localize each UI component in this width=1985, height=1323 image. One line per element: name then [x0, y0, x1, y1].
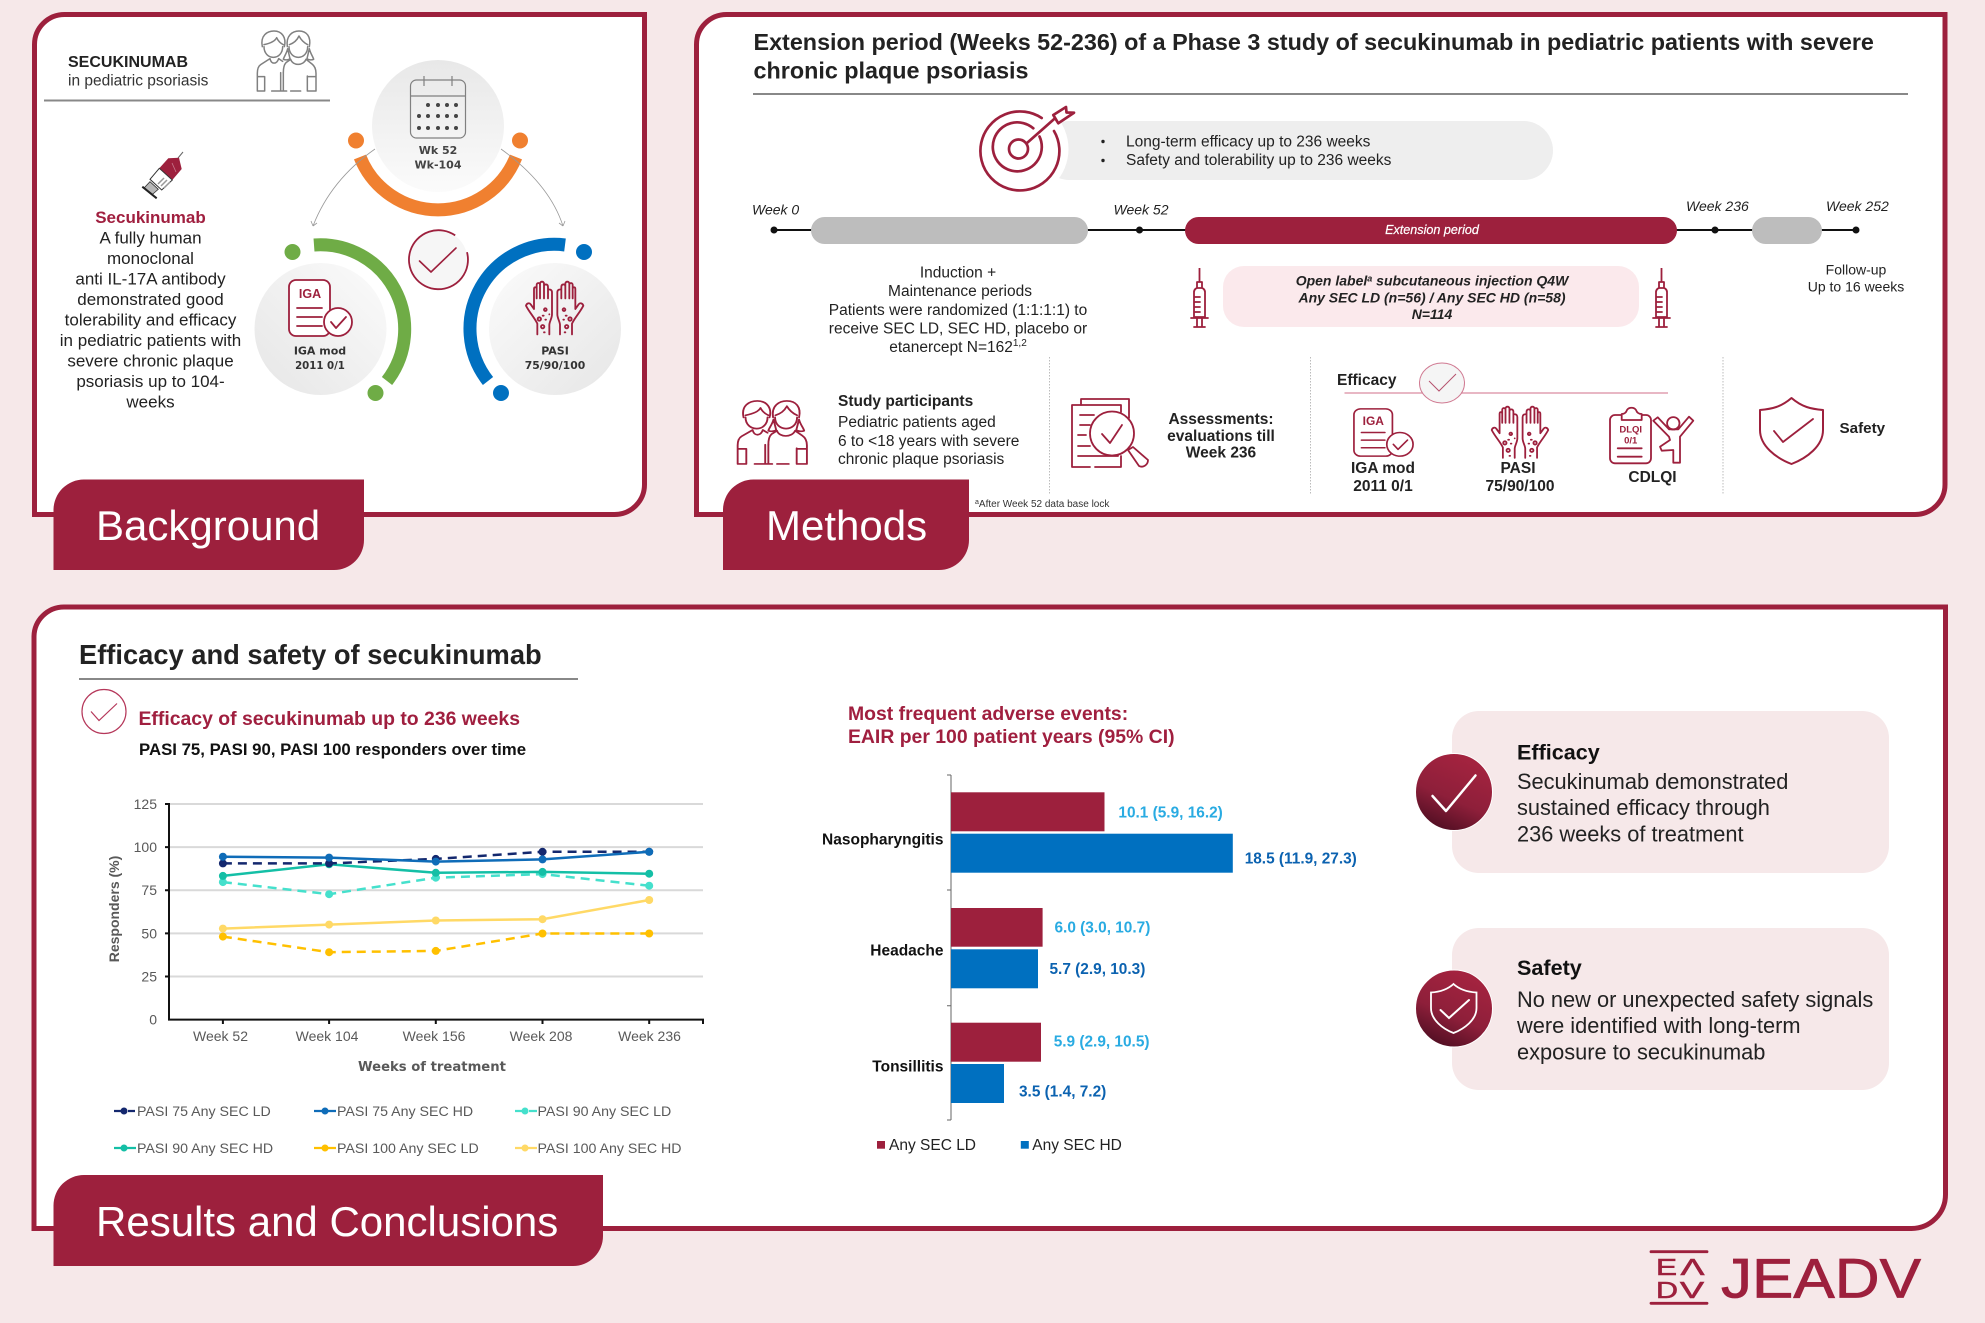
- text block: follow-up: Up to 16 weeks: [1808, 278, 1904, 294]
- line chart: responders over time: 100: [134, 839, 157, 855]
- line chart: responders over time: 0: [149, 1012, 157, 1028]
- text: PASI: PASI: [1500, 460, 1536, 477]
- timeline: Week 0: [752, 202, 799, 218]
- line chart: responders over time: Week 52: [193, 1028, 248, 1044]
- text block: secukinumab description: psoriasis up to 104-: [76, 372, 225, 391]
- line chart: responders over time: Week 104: [296, 1028, 359, 1044]
- icon: DLQI clipboard and child: 0/1: [1624, 435, 1638, 446]
- bar chart: adverse events: 5.9 (2.9, 10.5): [1054, 1034, 1150, 1051]
- text block: follow-up: Follow-up: [1826, 262, 1887, 278]
- text block: study participants: [838, 393, 1019, 468]
- icon: calendar: [410, 76, 466, 138]
- text block: induction and maintenance: Maintenance periods: [888, 283, 1032, 300]
- line chart: responders over time: 75: [141, 882, 157, 898]
- tab: methods: [723, 480, 969, 570]
- text: PASI: 75/90/100: [1486, 478, 1554, 495]
- text block: induction and maintenance: receive SEC LD, SEC HD, placebo or: [829, 320, 1087, 338]
- legend: line chart: PASI 90 Any SEC HD: [137, 1141, 273, 1157]
- series: PASI 75 Any SEC LD: [219, 848, 653, 867]
- logo: JEADV: Λ: [1680, 1254, 1705, 1280]
- heading: secukinumab in pediatric psoriasis: SECUKINUMAB: [68, 54, 188, 71]
- diagram: week 52 and week 104 node: Wk-104: [415, 158, 462, 172]
- arrow: to IGA node: [311, 149, 375, 226]
- text block: secukinumab description: weeks: [125, 392, 175, 412]
- series: PASI 100 Any SEC HD: [219, 896, 653, 933]
- footnote: After Week 52 data base lock: [979, 499, 1110, 510]
- text block: induction and maintenance: Patients were randomized (1:1:1:1) to: [829, 302, 1087, 319]
- open label pill: subcutaneous injection Q4W: [1372, 272, 1570, 288]
- efficacy heading: [1337, 363, 1668, 403]
- bar chart: adverse events: 5.7 (2.9, 10.3): [1050, 961, 1145, 978]
- tab: methods: Methods: [766, 502, 927, 549]
- icon: hands with plaques: [526, 282, 583, 334]
- card: efficacy conclusion: Secukinumab demonstrated: [1517, 769, 1788, 794]
- logo: JEADV: V: [1680, 1277, 1705, 1303]
- panel: results and conclusions: [34, 607, 1946, 1266]
- efficacy heading: Efficacy: [1337, 372, 1397, 389]
- icon: syringe right: [1653, 268, 1670, 327]
- footnote: a: [975, 499, 979, 506]
- diagram: PASI node: PASI: [541, 344, 569, 358]
- text block: induction and maintenance: [829, 264, 1087, 356]
- diagram: IGA mod node: 2011 0/1: [295, 361, 345, 372]
- series: PASI 75 Any SEC HD: [219, 848, 653, 866]
- icon: IGA document: [289, 280, 352, 336]
- icon: shield badge: [1416, 970, 1492, 1047]
- line chart: responders over time: Responders (%): [106, 856, 122, 962]
- diagram: IGA mod node: IGA mod: [294, 344, 346, 358]
- line chart: responders over time: [106, 796, 704, 1075]
- text block: study participants: 6 to <18 years with severe: [838, 433, 1019, 450]
- icon: syringe: [142, 152, 183, 198]
- line chart: responders over time: Week 156: [403, 1028, 466, 1044]
- text: safety: Safety: [1840, 420, 1886, 437]
- heading: secukinumab in pediatric psoriasis: in pediatric psoriasis: [68, 72, 209, 90]
- text block: secukinumab description: A fully human: [99, 228, 202, 248]
- icon: check badge: [1416, 754, 1492, 830]
- open label pill: Open label: [1296, 272, 1367, 288]
- card: safety conclusion: exposure to secukinumab: [1517, 1040, 1765, 1064]
- legend: bar chart: Any SEC HD: [1032, 1137, 1122, 1154]
- arrow: to PASI node: [501, 149, 565, 226]
- subheading: efficacy: PASI 75, PASI 90, PASI 100 responders over time: [139, 740, 526, 759]
- icon: DLQI clipboard and child: [1610, 408, 1693, 463]
- card: efficacy conclusion: Efficacy: [1517, 740, 1600, 764]
- objectives text: [1101, 134, 1392, 169]
- text: IGA mod: 2011 0/1: [1353, 478, 1413, 495]
- bar chart: adverse events: 10.1 (5.9, 16.2): [1118, 804, 1223, 821]
- open label pill: [1223, 266, 1639, 327]
- icon: DLQI clipboard and child: DLQI: [1619, 425, 1642, 436]
- icon: IGA small: [1354, 409, 1413, 456]
- series: PASI 100 Any SEC LD: [219, 930, 653, 956]
- text block: secukinumab description: tolerability and efficacy: [65, 310, 237, 330]
- heading: secukinumab in pediatric psoriasis: [44, 54, 330, 100]
- icon: study participants: [738, 401, 807, 464]
- line chart: responders over time: Weeks of treatment: [358, 1060, 506, 1075]
- bar chart: adverse events: [822, 775, 1357, 1120]
- card: efficacy conclusion: 236 weeks of treatment: [1517, 822, 1744, 846]
- timeline: [752, 198, 1889, 244]
- legend: line chart: PASI 75 Any SEC LD: [137, 1104, 271, 1120]
- bar chart: adverse events: 3.5 (1.4, 7.2): [1019, 1084, 1106, 1101]
- line chart: responders over time: 25: [141, 968, 157, 984]
- card: efficacy conclusion: sustained efficacy through: [1517, 795, 1770, 820]
- icon: check circle: [82, 690, 126, 734]
- text block: assessments: evaluations till: [1167, 428, 1275, 445]
- open label pill: Any SEC LD (n=56) / Any SEC HD (n=58): [1297, 290, 1566, 306]
- title: extension period: [753, 29, 1908, 94]
- icon: two children: [257, 31, 316, 91]
- text: IGA mod: [1351, 460, 1415, 495]
- bar chart: adverse events: Nasopharyngitis: [822, 831, 944, 848]
- text block: induction and maintenance: etanercept N=162: [889, 339, 1013, 356]
- timeline: Week 52: [1114, 202, 1169, 218]
- line chart: responders over time: 125: [134, 796, 157, 812]
- text block: study participants: Study participants: [838, 393, 973, 410]
- tab: background: Background: [96, 502, 320, 549]
- heading: adverse events: [848, 703, 1175, 748]
- diagram: week 52 and week 104 node: Wk 52: [419, 144, 457, 157]
- logo: JEADV: JEADV: [1721, 1246, 1922, 1310]
- icon: hands small: [1492, 407, 1548, 458]
- open label pill: a: [1367, 274, 1372, 284]
- timeline: Week 252: [1826, 198, 1889, 214]
- heading: adverse events: Most frequent adverse events:: [848, 703, 1128, 725]
- panel: background: [34, 14, 644, 570]
- diagram: week 52 and week 104 node: [348, 60, 528, 210]
- text: IGA mod: IGA mod: [1351, 460, 1415, 477]
- bar chart: adverse events: Tonsillitis: [872, 1059, 944, 1076]
- text block: assessments: Assessments:: [1168, 411, 1274, 428]
- text: CDLQI: CDLQI: [1628, 469, 1677, 486]
- bar chart: adverse events: 6.0 (3.0, 10.7): [1054, 919, 1150, 936]
- heading: efficacy and safety: Efficacy and safety of secukinumab: [79, 639, 542, 670]
- legend: line chart: PASI 100 Any SEC LD: [337, 1141, 479, 1157]
- objectives text: Safety and tolerability up to 236 weeks: [1126, 152, 1392, 169]
- open label pill: N=114: [1412, 306, 1453, 322]
- text block: induction and maintenance: 1,2: [1013, 338, 1027, 349]
- subheading: efficacy: [138, 708, 526, 759]
- text block: secukinumab description: severe chronic plaque: [67, 352, 234, 370]
- icon: syringe left: [1191, 268, 1208, 327]
- line chart: responders over time: Week 236: [618, 1028, 681, 1044]
- text block: induction and maintenance: Induction +: [920, 264, 996, 282]
- diagram: PASI node: [470, 244, 621, 401]
- text block: follow-up: [1808, 262, 1904, 294]
- diagram: PASI node: 75/90/100: [525, 359, 585, 372]
- logo: JEADV: [1651, 1246, 1922, 1310]
- logo: JEADV: E: [1656, 1254, 1677, 1280]
- legend: line chart: [114, 1104, 682, 1157]
- text block: secukinumab description: monoclonal: [107, 249, 194, 268]
- series: PASI 90 Any SEC LD: [219, 870, 653, 898]
- line chart: responders over time: 50: [141, 926, 157, 942]
- subheading: efficacy: Efficacy of secukinumab up to 236 weeks: [138, 708, 520, 730]
- timeline: Week 236: [1686, 198, 1749, 214]
- card: safety conclusion: Safety: [1517, 955, 1582, 980]
- tab: background: [54, 480, 364, 570]
- tab: results and conclusions: Results and Conclusions: [96, 1198, 558, 1245]
- icon: assessment documents: [1072, 399, 1148, 467]
- legend: line chart: PASI 100 Any SEC HD: [538, 1141, 682, 1157]
- title: extension period: Extension period (Weeks 52-236) of a Phase 3 study of secukinumab in pediatric patients with severe: [754, 29, 1874, 55]
- objectives text: Long-term efficacy up to 236 weeks: [1126, 134, 1371, 150]
- text block: secukinumab description: Secukinumab: [95, 208, 206, 227]
- text: PASI: [1486, 460, 1554, 495]
- series: PASI 90 Any SEC HD: [219, 860, 653, 880]
- heading: adverse events: EAIR per 100 patient years (95% CI): [848, 726, 1175, 748]
- icon: shield: [1760, 398, 1823, 464]
- icon: central check circle: [408, 230, 468, 290]
- bar chart: adverse events: 18.5 (11.9, 27.3): [1245, 850, 1357, 867]
- legend: line chart: PASI 75 Any SEC HD: [337, 1104, 473, 1120]
- panel: methods: [696, 14, 1945, 570]
- icon: IGA small: IGA: [1363, 414, 1384, 428]
- text block: secukinumab description: anti IL-17A antibody: [75, 270, 226, 288]
- objectives pill: [968, 99, 1553, 199]
- legend: bar chart: Any SEC LD: [889, 1137, 976, 1154]
- logo: JEADV: D: [1656, 1277, 1678, 1303]
- icon: IGA document: IGA: [299, 287, 321, 301]
- line chart: responders over time: Week 208: [510, 1028, 573, 1044]
- legend: line chart: PASI 90 Any SEC LD: [538, 1104, 671, 1120]
- text block: study participants: Pediatric patients aged: [838, 414, 996, 431]
- title: extension period: chronic plaque psoriasis: [754, 58, 1029, 84]
- icon: target: [980, 107, 1074, 190]
- text block: secukinumab description: in pediatric patients with: [60, 331, 241, 350]
- text block: assessments: Week 236: [1186, 444, 1257, 462]
- card: safety conclusion: No new or unexpected safety signals: [1517, 987, 1873, 1012]
- diagram: IGA mod node: [254, 244, 405, 401]
- card: safety conclusion: were identified with long-term: [1516, 1013, 1800, 1038]
- card: safety conclusion: [1416, 928, 1889, 1090]
- text block: secukinumab description: [60, 208, 241, 412]
- text block: secukinumab description: demonstrated good: [77, 290, 224, 309]
- card: efficacy conclusion: [1416, 711, 1889, 873]
- legend: bar chart: [877, 1137, 1122, 1154]
- text block: assessments: [1167, 411, 1275, 462]
- timeline: Extension period: [1385, 223, 1480, 237]
- bar chart: adverse events: Headache: [870, 942, 944, 959]
- text block: study participants: chronic plaque psoriasis: [838, 451, 1005, 468]
- tab: results and conclusions: [54, 1175, 603, 1266]
